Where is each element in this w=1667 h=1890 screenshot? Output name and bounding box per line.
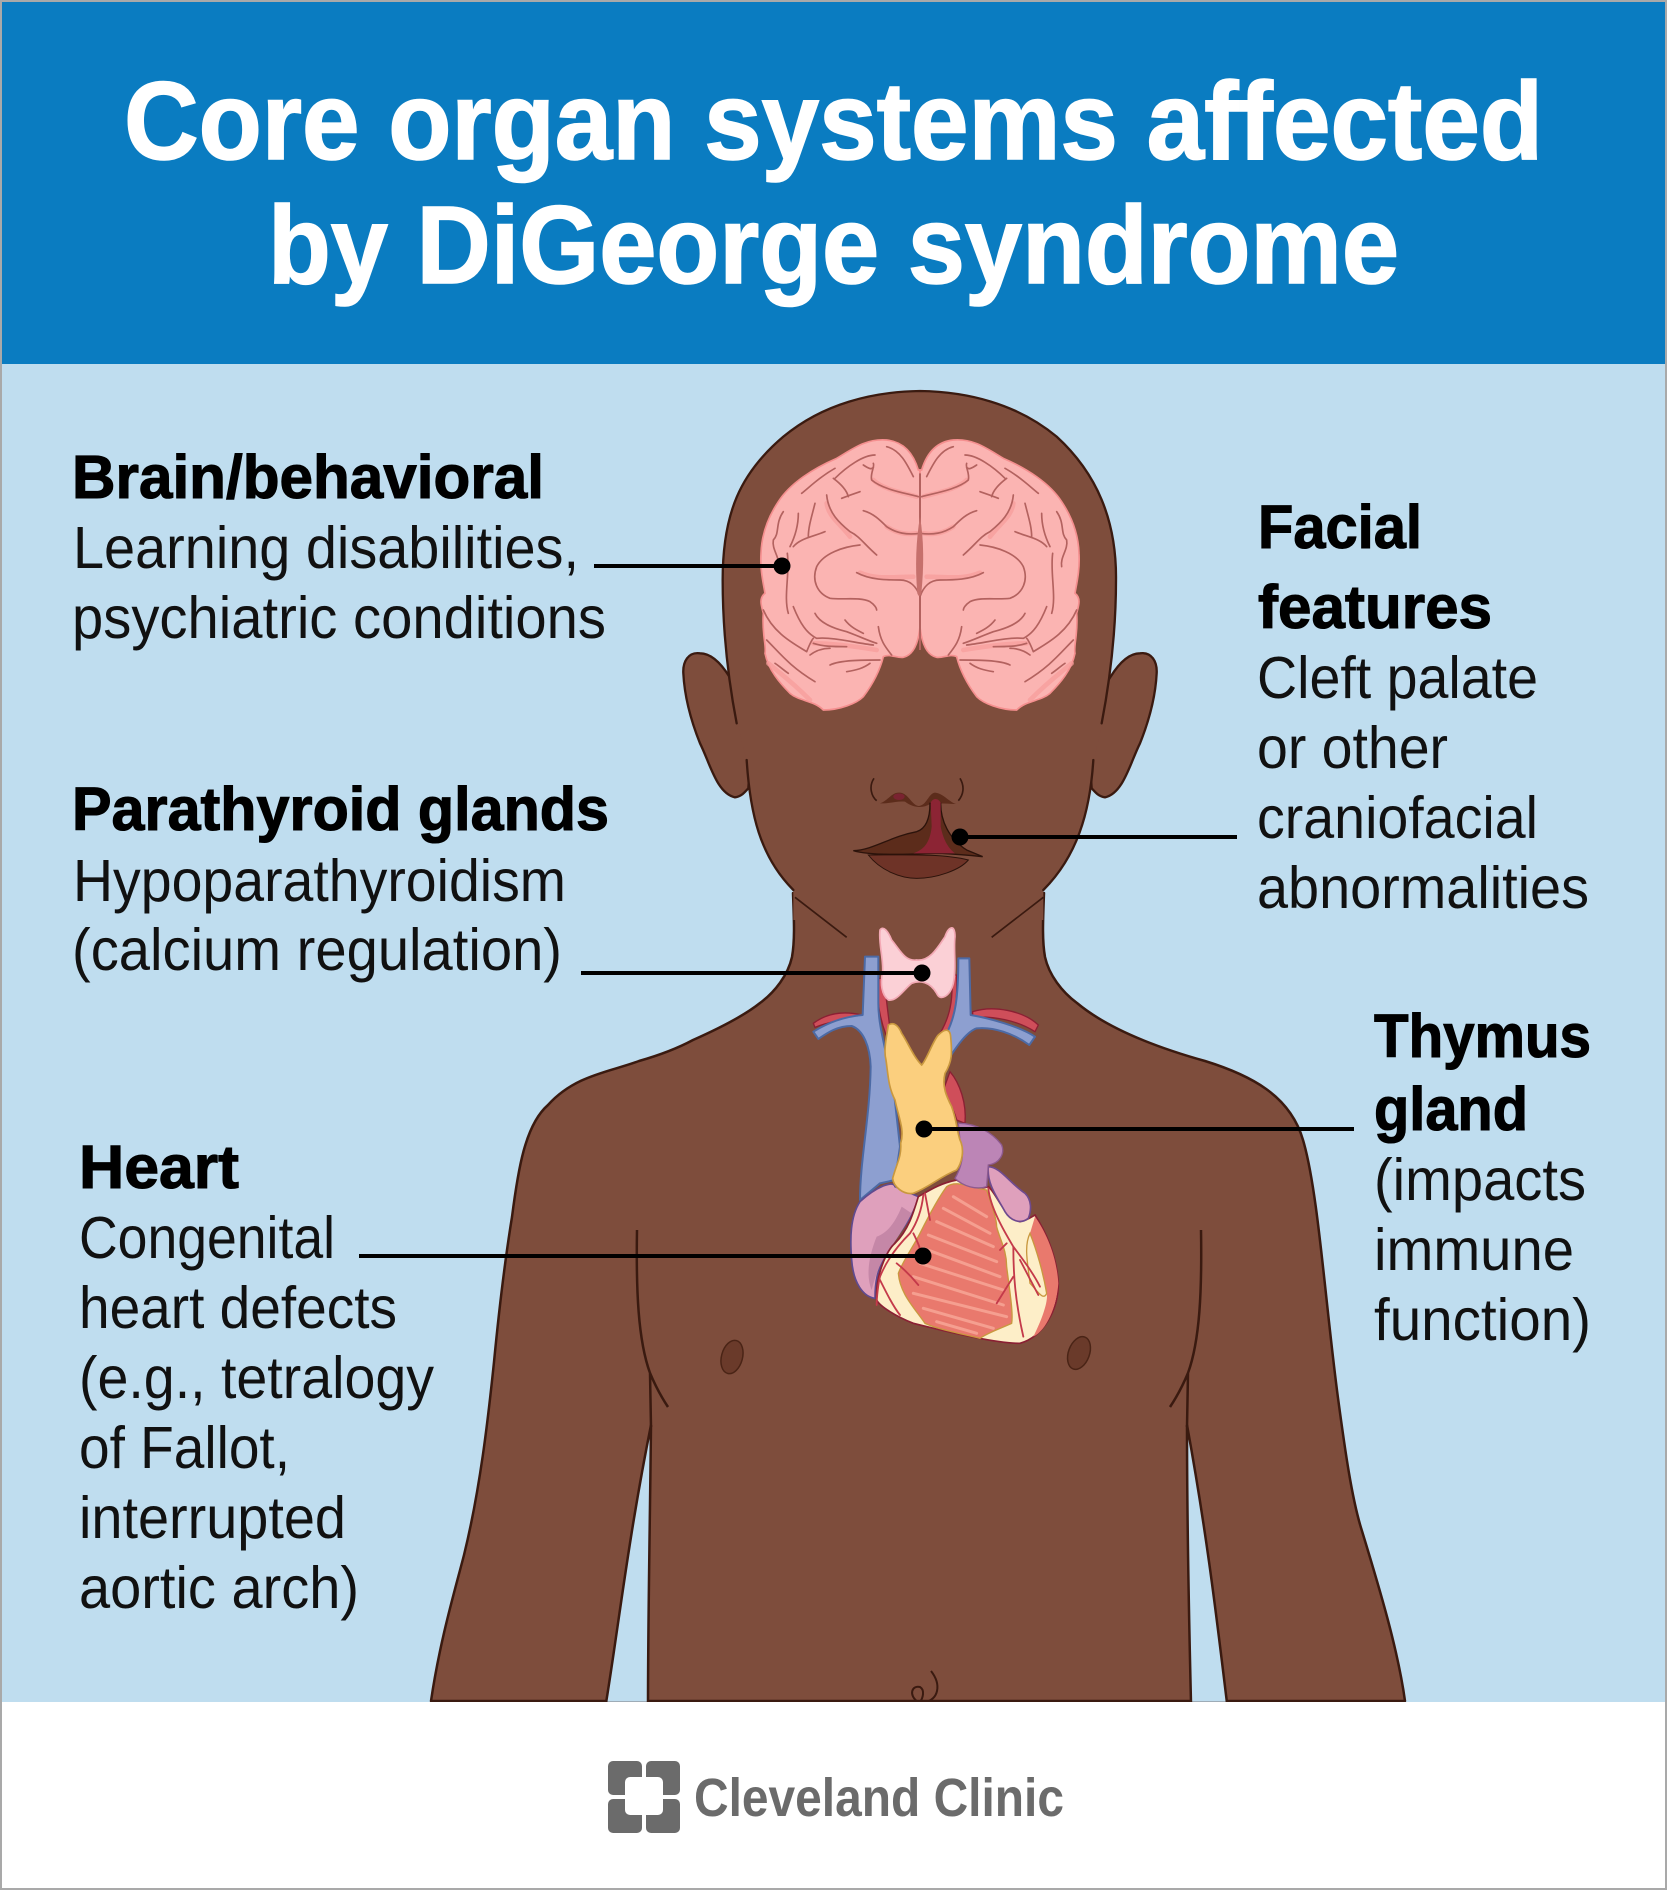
veins: [813, 957, 1035, 1200]
nipple left: [717, 1338, 747, 1376]
label: heart: heart defects: [79, 1275, 397, 1341]
label: thymus gland: Thymus: [1374, 1002, 1591, 1070]
icon: Cleveland Clinic cross: [608, 1761, 680, 1833]
label: heart: Heart: [79, 1133, 239, 1201]
arteries: [813, 975, 1038, 1123]
thymus gland: [885, 1024, 962, 1194]
label: facial features: Facial: [1258, 493, 1422, 561]
label: facial features: [1257, 493, 1589, 921]
organs: neck, thyroid, vessels, thymus, heart: [795, 897, 1058, 1343]
figure: child's body with organs: [431, 391, 1405, 1703]
leader line: facial: [952, 828, 1237, 846]
label: heart: of Fallot,: [79, 1415, 290, 1481]
label: thymus gland: function): [1374, 1287, 1591, 1353]
head and face: [683, 391, 1157, 920]
panel: footer: [0, 1702, 1667, 1890]
panel: illustration background: [0, 364, 1667, 1702]
head fill: [723, 391, 1116, 920]
body silhouette: [431, 893, 1405, 1701]
title: [124, 60, 1543, 307]
label: heart: interrupted: [79, 1485, 346, 1551]
label: parathyroid glands: (calcium regulation): [72, 917, 562, 983]
nipple right: [1063, 1333, 1095, 1373]
ear right: [1087, 653, 1157, 797]
leader line: thymus: [916, 1120, 1354, 1138]
leader line: parathyroid: [581, 964, 930, 982]
right arm gap: [1187, 1425, 1227, 1703]
left arm gap: [606, 1425, 651, 1703]
label: thymus gland: immune: [1374, 1217, 1574, 1283]
label: brain/behavioral: Learning disabilities,: [73, 515, 579, 581]
panel: header band: [0, 0, 1667, 364]
title: Core organ systems affected: [124, 60, 1543, 183]
label: heart: [79, 1133, 434, 1621]
label: brain/behavioral: psychiatric conditions: [72, 585, 606, 651]
navel: [912, 1671, 937, 1702]
neck lines: [795, 897, 1043, 937]
armpit and chest lines: [637, 1230, 1201, 1427]
label: heart: (e.g., tetralogy: [79, 1345, 434, 1411]
label: thymus gland: (impacts: [1374, 1147, 1586, 1213]
label: brain/behavioral: Brain/behavioral: [72, 443, 544, 511]
label: facial features: features: [1258, 573, 1492, 641]
label: facial features: craniofacial: [1257, 785, 1538, 851]
label: parathyroid glands: Parathyroid glands: [72, 775, 609, 843]
label: thymus gland: [1374, 1002, 1591, 1353]
label: facial features: or other: [1257, 715, 1448, 781]
logo: Cleveland Clinic: [608, 1761, 1064, 1833]
label: heart: aortic arch): [79, 1555, 359, 1621]
label: brain/behavioral: [72, 443, 606, 651]
logo: Cleveland Clinic: Cleveland Clinic: [694, 1768, 1064, 1828]
label: parathyroid glands: [72, 775, 609, 983]
label: facial features: Cleft palate: [1257, 645, 1538, 711]
head outline: [723, 391, 1116, 890]
heart body: [851, 1123, 1058, 1343]
leader line: heart: [359, 1248, 932, 1264]
label: heart: Congenital: [79, 1205, 335, 1271]
label: facial features: abnormalities: [1257, 855, 1589, 921]
title: by DiGeorge syndrome: [268, 184, 1399, 307]
nose: [871, 778, 963, 807]
leader line: brain: [594, 558, 790, 574]
cleft lip: [853, 799, 983, 878]
thyroid and parathyroid glands: [880, 928, 955, 1000]
label: parathyroid glands: Hypoparathyroidism: [73, 848, 566, 914]
label: thymus gland: gland: [1374, 1075, 1528, 1143]
brain: [761, 440, 1079, 710]
ear left: [683, 653, 753, 797]
